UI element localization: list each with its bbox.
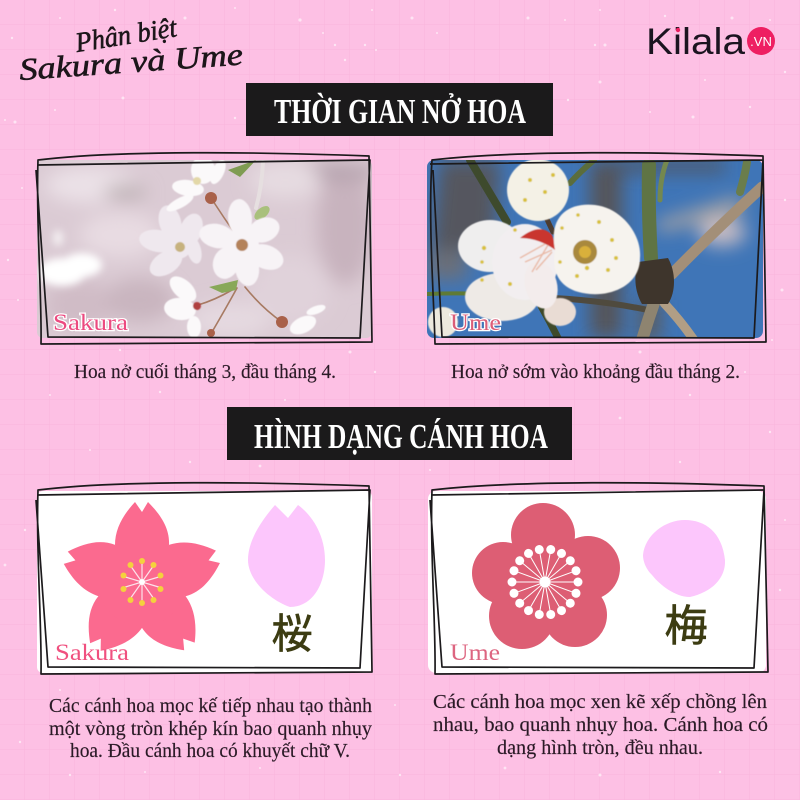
icon: sakura single petal — [248, 505, 325, 607]
label: Ume: Ume — [450, 640, 500, 665]
frame: sakura shape — [36, 483, 372, 674]
ume branch knot — [635, 258, 674, 304]
text block: Ume description: nhau, bao quanh nhụy hoa. Cánh hoa có — [433, 714, 768, 736]
frame: ume shape — [430, 483, 768, 674]
ume stamens — [508, 545, 582, 619]
text block: Sakura description: hoa. Đầu cánh hoa có khuyết chữ V. — [70, 740, 350, 762]
text block: Sakura description — [49, 695, 372, 762]
ume branches — [427, 160, 762, 340]
heading: Thời gian nở hoa: THỜI GIAN NỞ HOA — [274, 91, 527, 131]
frame: ume photo — [430, 153, 766, 344]
ume blossoms — [428, 159, 640, 337]
caption: Ume bloom time: Hoa nở sớm vào khoảng đầu tháng 2. — [451, 362, 740, 383]
heading: Hình dạng cánh hoa — [227, 407, 572, 460]
text block: Ume description — [433, 691, 768, 759]
caption: Sakura bloom time: Hoa nở cuối tháng 3, đầu tháng 4. — [74, 362, 336, 383]
text block: Ume description: dạng hình tròn, đều nhau. — [497, 737, 703, 759]
panel: Ume petal shape — [428, 483, 768, 674]
text block: Sakura description: Các cánh hoa mọc kế tiếp nhau tạo thành — [49, 695, 372, 717]
icon: ume flower — [472, 503, 620, 649]
label: Ume: Ume — [450, 310, 501, 335]
icon: ume single petal — [643, 520, 725, 597]
sakura buds and leaves — [205, 160, 288, 337]
text block: Ume description: Các cánh hoa mọc xen kẽ xếp chồng lên — [433, 691, 767, 713]
title: Phân biệt Sakura và Ume — [18, 12, 244, 87]
logo: Kilala.VN: .VN — [750, 34, 772, 49]
text block: Sakura description: một vòng tròn khép kín bao quanh nhụy — [49, 718, 372, 740]
kanji: sakura: 桜 — [272, 600, 312, 660]
kanji: ume: 梅 — [664, 592, 708, 654]
frame: sakura photo — [36, 153, 372, 344]
title: Phân biệt Sakura và Ume: Sakura và Ume — [18, 36, 244, 87]
sakura branches — [198, 162, 282, 332]
label: Sakura: Sakura — [55, 640, 129, 665]
heading: Hình dạng cánh hoa: HÌNH DẠNG CÁNH HOA — [254, 417, 549, 456]
sakura blossoms — [137, 156, 327, 338]
title: Phân biệt Sakura và Ume: Phân biệt — [72, 12, 180, 59]
icon: sakura flower — [58, 502, 226, 663]
panel: Ume photo — [427, 153, 766, 344]
label: Sakura: Sakura — [53, 310, 128, 335]
panel: Sakura petal shape — [36, 483, 372, 674]
panel: Sakura photo — [36, 153, 380, 344]
logo: Kilala.VN: Kilala — [646, 21, 745, 62]
heading: Thời gian nở hoa — [246, 83, 553, 136]
